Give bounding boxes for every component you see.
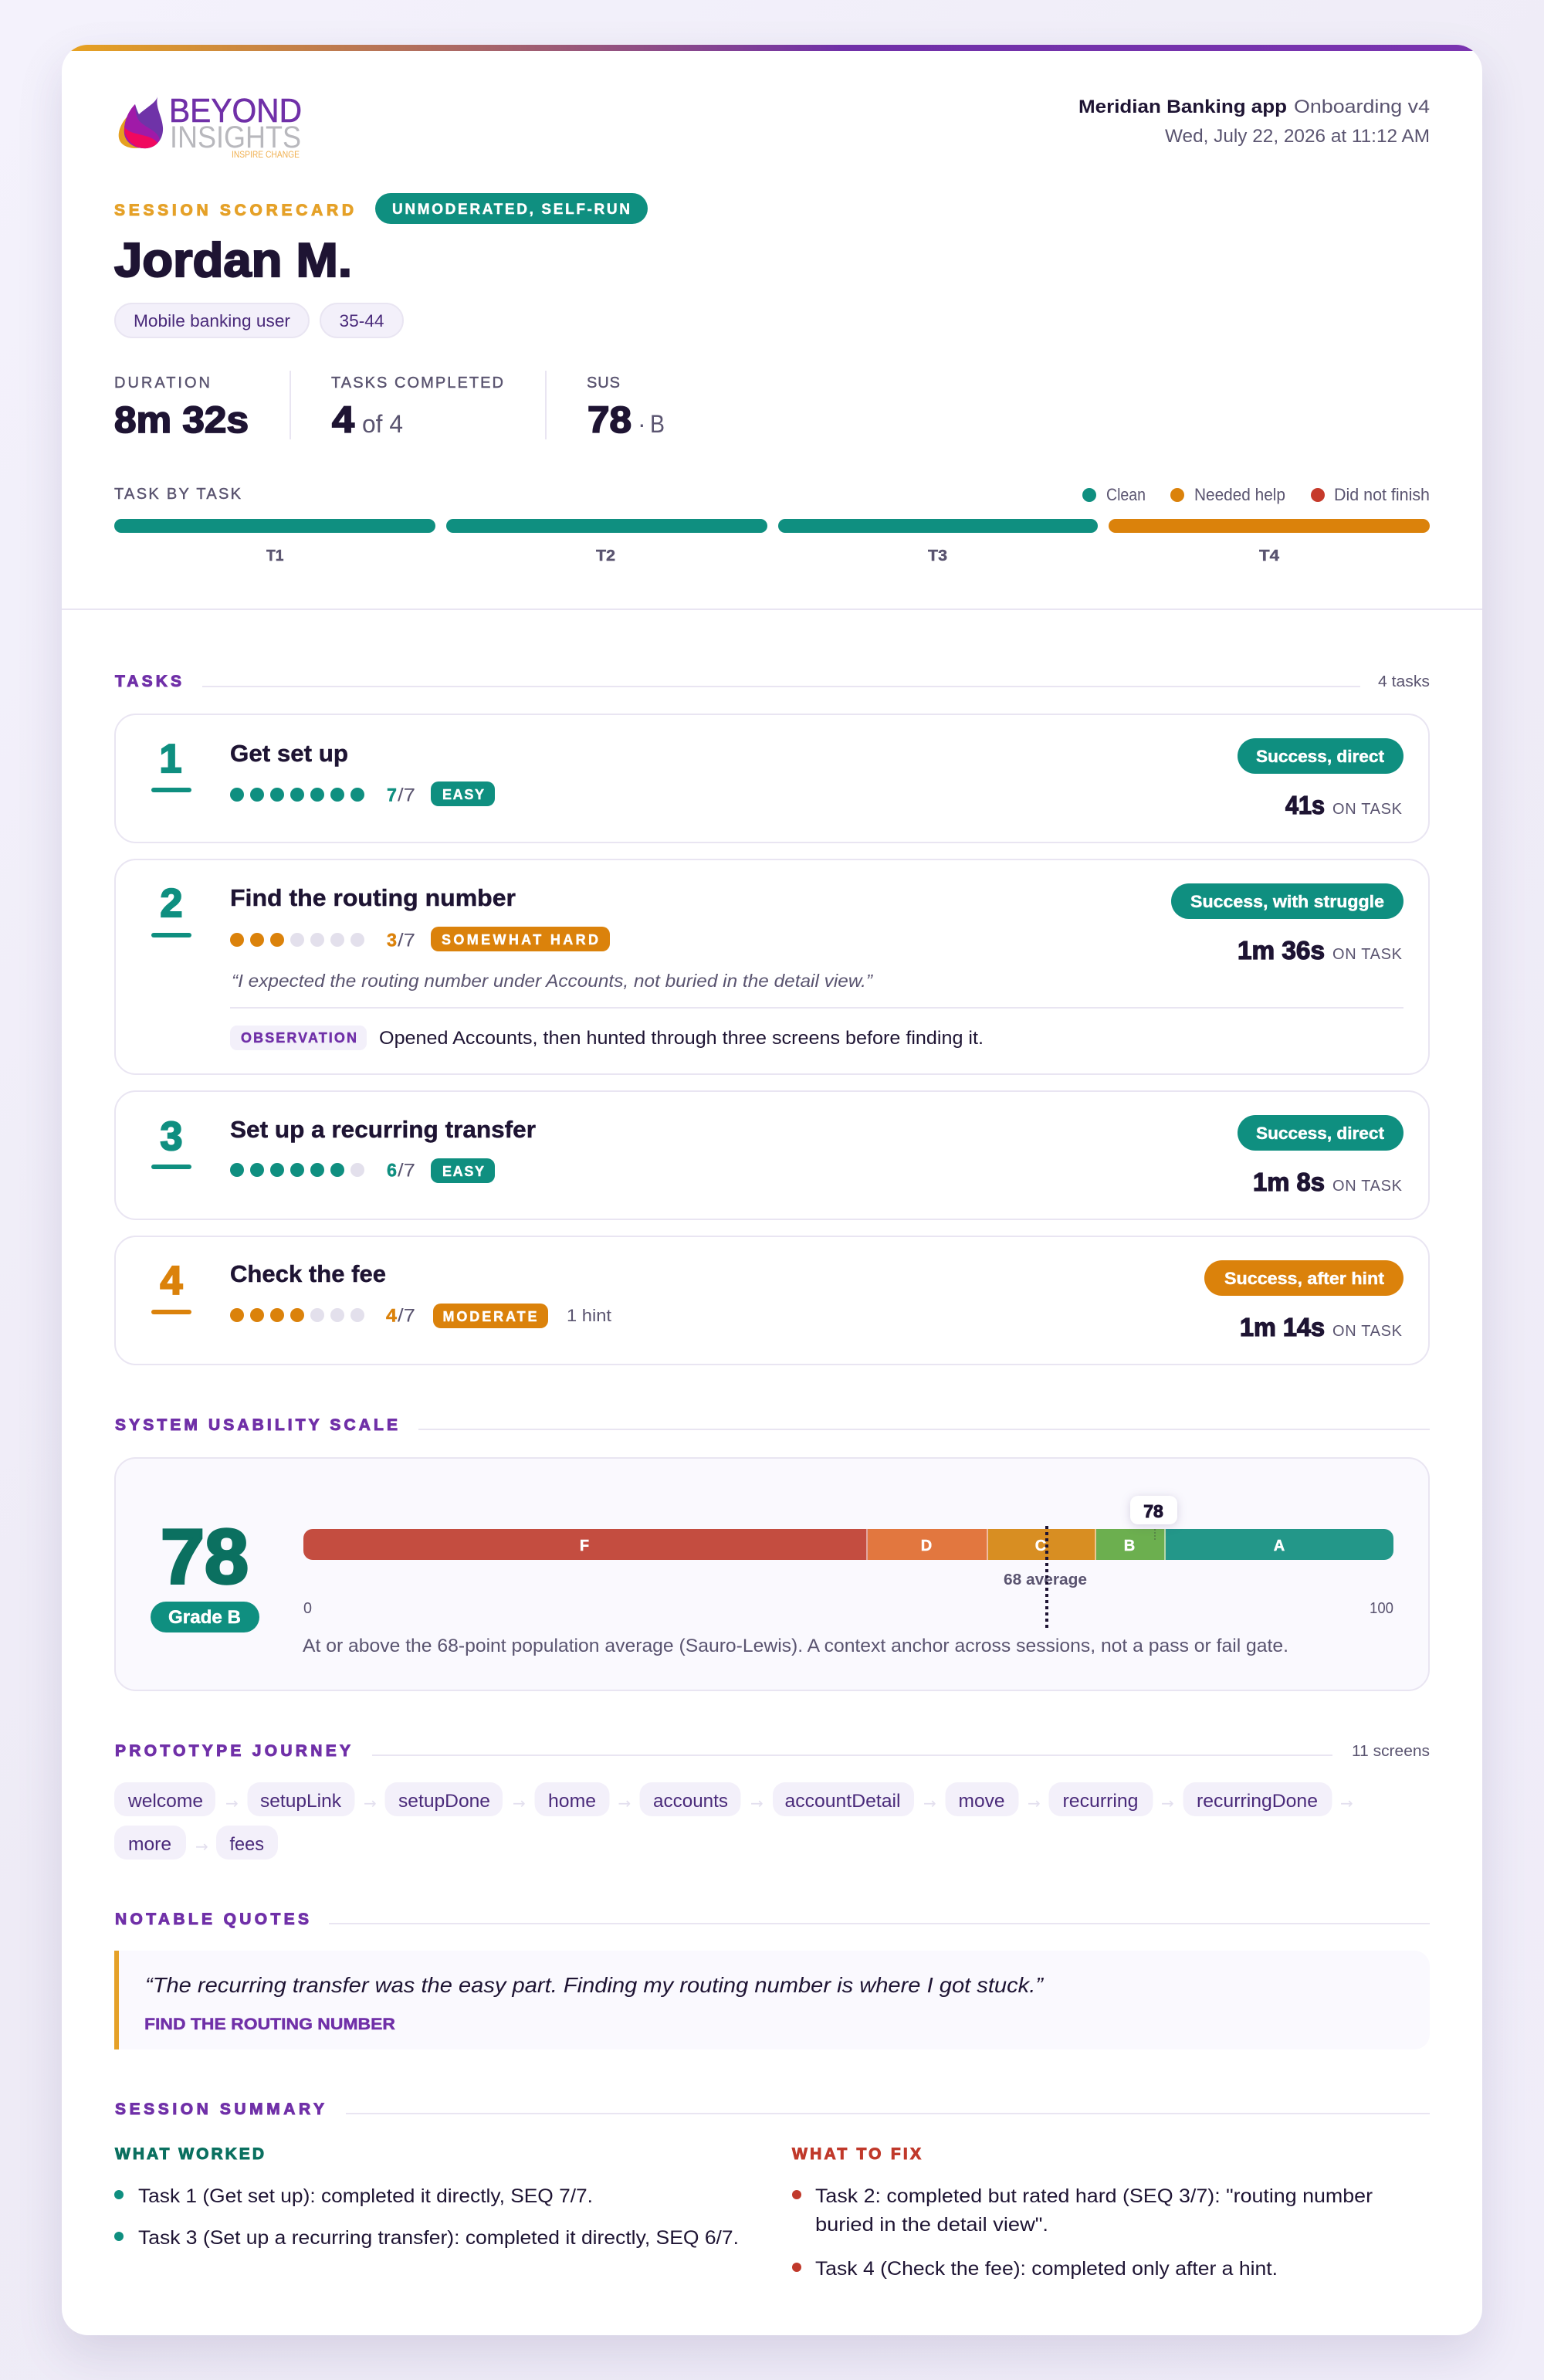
study meta: Onboarding v4: [1294, 97, 1430, 117]
time on task: [1238, 936, 1403, 965]
score marker: [1154, 1529, 1156, 1541]
arrow: →: [1028, 1794, 1041, 1812]
status: success after hint: Success, after hint: [1224, 1269, 1385, 1288]
logo wordmark: [169, 92, 302, 160]
time on task: ON TASK: [1332, 1178, 1403, 1195]
badge: somewhat hard: SOMEWHAT HARD: [442, 932, 598, 948]
screen: move: [945, 1782, 1019, 1816]
panel: what worked: Task 3 (Set up a recurring transfer): completed it directly, SEQ 6/7.: [138, 2227, 739, 2249]
top accent bar: [62, 45, 1482, 51]
panel: task 1: 1: [160, 737, 181, 781]
stat: SUS: [587, 375, 665, 441]
section heading: prototype journey: PROTOTYPE JOURNEY: [115, 1742, 350, 1760]
arrow: →: [750, 1794, 764, 1812]
panel: task 1: /7: [398, 785, 415, 806]
panel: task 1: 7: [387, 785, 397, 806]
time on task: ON TASK: [1332, 801, 1403, 818]
screen: accounts: [639, 1782, 741, 1816]
screen: recurring: recurring: [1062, 1791, 1138, 1812]
legend: Did not finish: [1334, 485, 1430, 504]
panel: what to fix: Task 2: completed but rated hard (SEQ 3/7): "routing number: [815, 2185, 1373, 2207]
panel: task 4: Check the fee: [230, 1260, 386, 1287]
time on task: [1253, 1168, 1403, 1196]
study meta: Wed, July 22, 2026 at 11:12 AM: [1165, 126, 1430, 147]
stat: SUS: B: [650, 410, 665, 438]
chip: age: [320, 303, 403, 337]
stat: duration: [114, 375, 249, 441]
grade pill: Grade B: [168, 1607, 241, 1628]
grade letters: C: [1035, 1538, 1046, 1554]
panel: task 2: 2: [161, 881, 182, 926]
observation: OBSERVATION: [241, 1030, 357, 1046]
score callout: 78: [1143, 1501, 1163, 1521]
panel: task 3: 6: [387, 1160, 397, 1182]
scale ends: [303, 1600, 1393, 1617]
task by task strip: TASK BY TASK: [114, 486, 242, 503]
screen: welcome: [114, 1782, 215, 1816]
SEQ dots: [230, 788, 364, 802]
panel: what to fix: WHAT TO FIX: [792, 2145, 921, 2163]
screen: recurringDone: [1183, 1782, 1332, 1816]
task quote: “I expected the routing number under Accounts, not buried in the detail view.”: [232, 971, 873, 991]
stat: tasks completed: [331, 375, 503, 441]
stat: duration: DURATION: [114, 375, 210, 392]
stat: tasks completed: 4: [332, 400, 354, 441]
section heading: tasks: 4 tasks: [1378, 673, 1430, 690]
panel: task 3: 3: [161, 1114, 182, 1159]
SEQ dots: [230, 933, 364, 947]
status: success direct: Success, direct: [1256, 1124, 1385, 1143]
panel: what to fix: buried in the detail view".: [815, 2214, 1048, 2236]
panel: task 3: [115, 1091, 1429, 1219]
panel: SUS: [115, 1458, 1429, 1690]
legend: Clean: [1106, 485, 1146, 504]
task by task strip: T1: [266, 548, 284, 564]
task by task strip: T2: [596, 548, 615, 564]
panel: task 1: [115, 714, 1429, 842]
screen: home: home: [548, 1791, 596, 1812]
chip: mobile banking user: Mobile banking user: [134, 311, 290, 331]
logo wordmark: INSPIRE CHANGE: [232, 149, 300, 160]
section heading: tasks: TASKS: [115, 673, 181, 690]
arrow: →: [225, 1794, 239, 1812]
panel: what worked: Task 1 (Get set up): completed it directly, SEQ 7/7.: [138, 2185, 593, 2207]
section heading: session summary: SESSION SUMMARY: [115, 2100, 324, 2118]
SUS score: 78: [161, 1514, 249, 1600]
legend: [1082, 485, 1430, 504]
badge: somewhat hard: [431, 927, 610, 951]
section heading: prototype journey: [115, 1742, 1430, 1760]
arrow: →: [923, 1794, 936, 1812]
hint count: 1 hint: [567, 1306, 611, 1325]
section heading: notable quotes: NOTABLE QUOTES: [115, 1910, 309, 1928]
journey flow: [114, 1782, 1353, 1860]
time on task: ON TASK: [1332, 1323, 1403, 1340]
status: success with struggle: [1171, 883, 1403, 919]
stat: SUS: 78: [587, 400, 631, 441]
screen: more: more: [128, 1834, 171, 1855]
stat: SUS: ·: [638, 410, 646, 438]
grade letters: F: [580, 1538, 589, 1554]
panel: task 4: [115, 1236, 1429, 1365]
arrow: →: [195, 1837, 208, 1856]
screen: setupLink: [247, 1782, 355, 1816]
section heading: tasks: [115, 673, 1430, 690]
stat: SUS: SUS: [587, 375, 620, 392]
screen: setupDone: setupDone: [398, 1791, 490, 1812]
screen: home: [534, 1782, 610, 1816]
observation: [230, 1026, 984, 1050]
time on task: 1m 36s: [1238, 936, 1325, 965]
panel: task 4: 4: [386, 1305, 398, 1327]
SEQ dots: [230, 1308, 364, 1322]
grade letters: D: [921, 1538, 932, 1554]
icon: flame: [119, 97, 163, 148]
grade letters: [580, 1538, 1285, 1554]
screen: accountDetail: [773, 1782, 914, 1816]
panel: task 3: Set up a recurring transfer: [230, 1116, 536, 1143]
task by task strip: T3: [928, 548, 947, 564]
status: success with struggle: Success, with struggle: [1190, 892, 1384, 911]
screen: recurring: [1048, 1782, 1153, 1816]
legend: Needed help: [1194, 485, 1285, 504]
panel: what to fix: [792, 2145, 1373, 2280]
status: success after hint: [1204, 1260, 1403, 1296]
header panel: [114, 92, 1430, 564]
screen: accountDetail: accountDetail: [784, 1791, 900, 1812]
arrow: →: [618, 1794, 631, 1812]
time on task: [1240, 1313, 1403, 1341]
time on task: 41s: [1285, 791, 1325, 819]
score callout: [1130, 1496, 1177, 1524]
badge: moderate: MODERATE: [443, 1309, 537, 1324]
screen: fees: [216, 1826, 278, 1860]
screen: move: move: [959, 1791, 1005, 1812]
time on task: ON TASK: [1332, 946, 1403, 963]
badge: easy: [431, 781, 495, 806]
observation: Opened Accounts, then hunted through three screens before finding it.: [379, 1028, 984, 1049]
status: success direct: [1238, 738, 1403, 774]
scale ends: 100: [1370, 1600, 1393, 1617]
panel: task 4: /7: [398, 1305, 415, 1327]
badge: moderate: [433, 1304, 548, 1328]
panel: task 2: 3: [387, 930, 397, 951]
task by task strip: [114, 485, 1430, 564]
panel: quote: [114, 1951, 1044, 2049]
screen: recurringDone: recurringDone: [1197, 1791, 1318, 1812]
panel: quote: FIND THE ROUTING NUMBER: [144, 2016, 395, 2033]
logo: Beyond Insights: [119, 92, 302, 160]
grade scale bar: [303, 1529, 1393, 1560]
logo wordmark: BEYOND: [169, 92, 302, 130]
panel: what worked: [114, 2145, 739, 2249]
stat: tasks completed: of 4: [362, 410, 403, 438]
badge: unmoderated: UNMODERATED, SELF-RUN: [392, 202, 630, 218]
panel: quote: “The recurring transfer was the easy part. Finding my routing number is where I got stuck.”: [145, 1973, 1045, 1997]
status: success direct: Success, direct: [1256, 747, 1385, 766]
SUS note: At or above the 68-point population average (Sauro-Lewis). A context anchor across sessions, not a pass or fail gate.: [303, 1636, 1288, 1656]
participant name: Jordan M.: [114, 234, 352, 287]
arrow: →: [1340, 1794, 1353, 1812]
arrow: →: [364, 1794, 377, 1812]
average marker: [1045, 1526, 1048, 1631]
eyebrow: session scorecard: SESSION SCORECARD: [114, 202, 354, 219]
grade letters: B: [1124, 1538, 1135, 1554]
badge: easy: EASY: [442, 1164, 484, 1179]
grade pill: [151, 1602, 259, 1632]
panel: task 1: Get set up: [230, 740, 348, 767]
panel: task 2: /7: [398, 930, 415, 951]
screen: setupLink: setupLink: [260, 1791, 342, 1812]
grade letters: A: [1274, 1538, 1285, 1554]
study meta: Meridian Banking app: [1078, 97, 1287, 117]
status: success direct: [1238, 1115, 1403, 1151]
study meta: [1078, 97, 1430, 147]
time on task: 1m 8s: [1253, 1168, 1325, 1196]
stat: tasks completed: TASKS COMPLETED: [331, 375, 503, 392]
chip: age: 35-44: [340, 311, 384, 331]
screen: setupDone: [384, 1782, 503, 1816]
scale ends: 0: [303, 1600, 312, 1617]
section heading: prototype journey: 11 screens: [1352, 1743, 1430, 1760]
badge: easy: [431, 1158, 495, 1183]
badge: easy: EASY: [442, 787, 484, 802]
logo wordmark: INSIGHTS: [170, 120, 301, 154]
screen: fees: fees: [230, 1834, 264, 1855]
SEQ dots: [230, 1163, 364, 1177]
badge: unmoderated: [375, 193, 648, 224]
stat: duration: 8m 32s: [114, 400, 249, 441]
panel: what to fix: Task 4 (Check the fee): completed only after a hint.: [815, 2258, 1278, 2280]
panel: task 3: /7: [398, 1160, 415, 1182]
chip: mobile banking user: [115, 303, 309, 337]
section heading: system usability scale: SYSTEM USABILITY SCALE: [115, 1416, 398, 1434]
time on task: [1285, 791, 1403, 819]
screen: more: [114, 1826, 186, 1860]
panel: what worked: WHAT WORKED: [115, 2145, 264, 2163]
panel: task 2: Find the routing number: [230, 884, 516, 911]
arrow: →: [513, 1794, 526, 1812]
screen: accounts: accounts: [653, 1791, 728, 1812]
panel: task 4: 4: [161, 1259, 183, 1304]
time on task: 1m 14s: [1240, 1313, 1325, 1341]
screen: welcome: welcome: [127, 1791, 203, 1812]
average label: 68 average: [1004, 1571, 1087, 1588]
task by task strip: T4: [1259, 548, 1280, 564]
arrow: →: [1161, 1794, 1174, 1812]
panel: task 2: [115, 859, 1429, 1074]
